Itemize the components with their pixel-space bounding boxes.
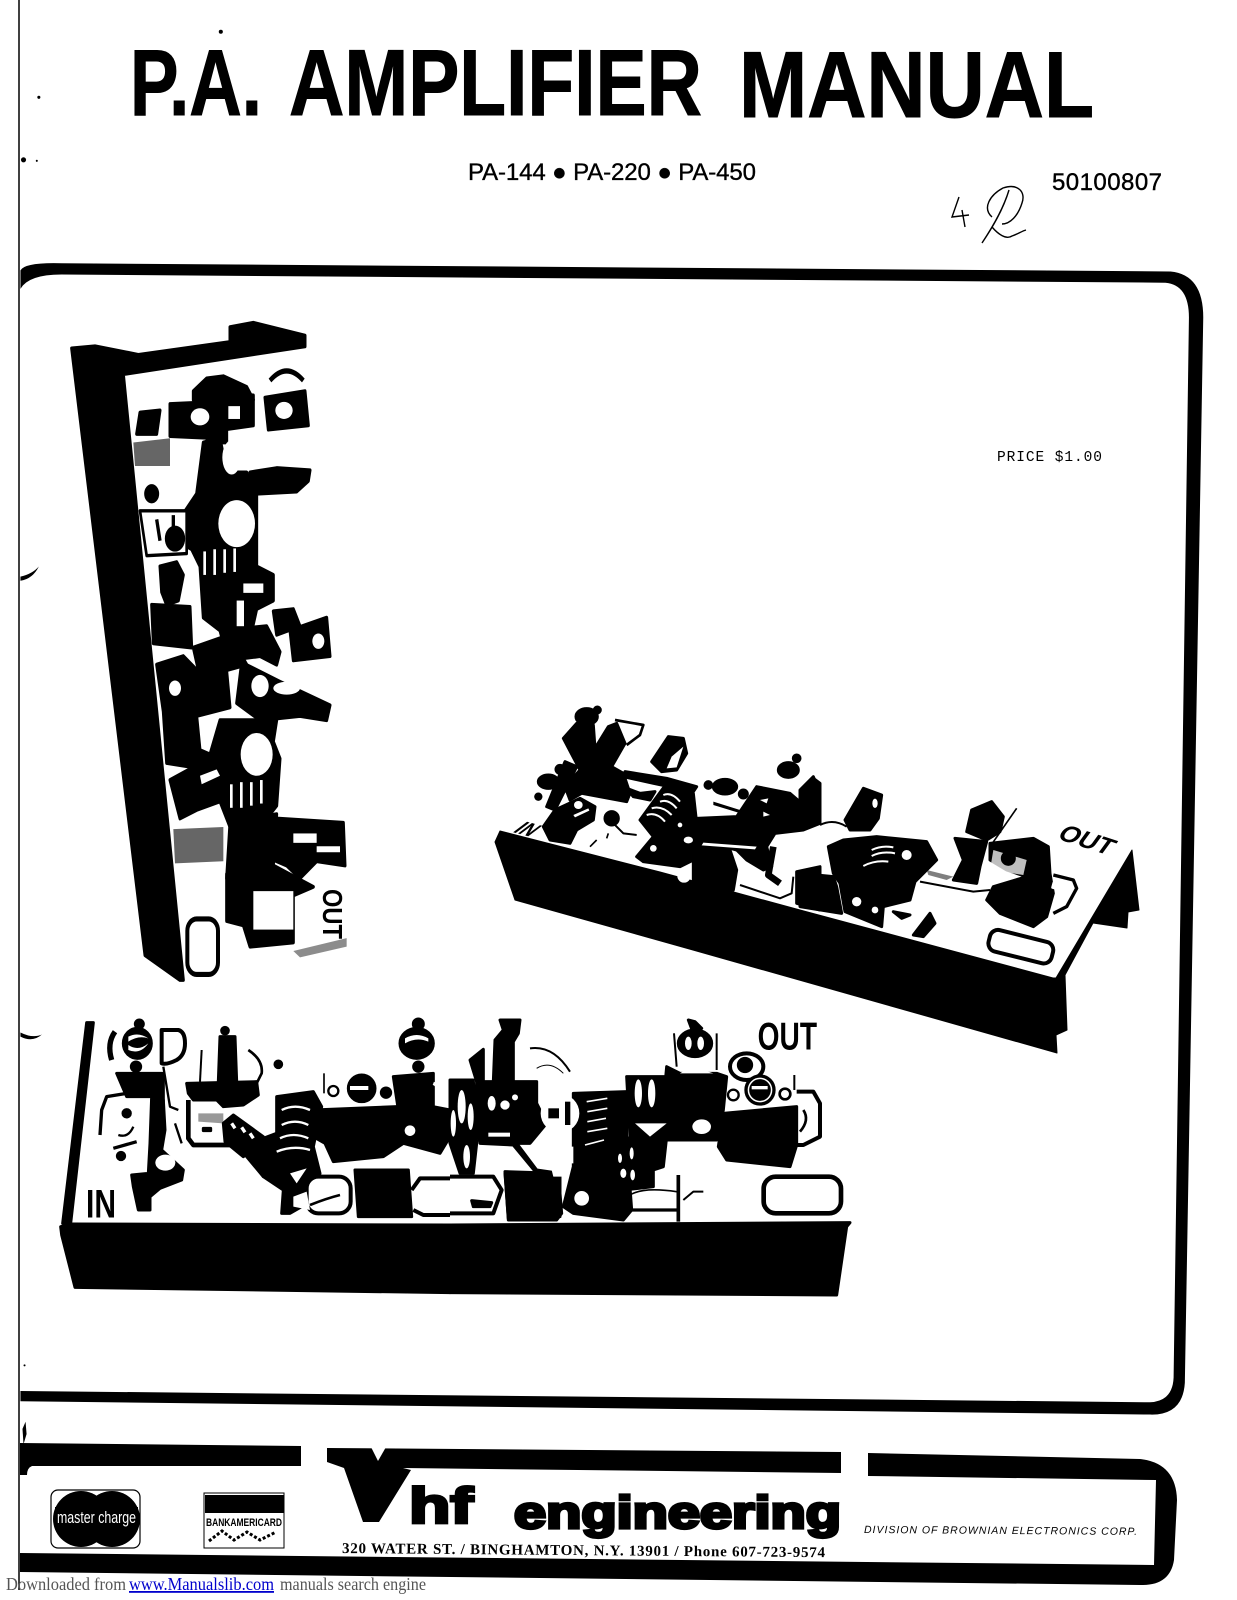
heat sink side (61, 1224, 450, 1293)
photo: vertical amplifier module (72, 323, 348, 980)
scan marks (20, 30, 223, 1444)
download footer: manuals search engine (280, 1574, 426, 1594)
heat sink side (450, 1223, 850, 1295)
title: P.A. (130, 30, 262, 135)
footer band (20, 1443, 1177, 1585)
download footer: Downloaded from (6, 1574, 126, 1594)
part number: 50100807 (1052, 169, 1162, 196)
heat sink side (72, 323, 305, 980)
title (130, 30, 1094, 137)
mounting slot (987, 928, 1055, 965)
photo: angled amplifier module (495, 707, 1139, 1053)
division line: DIVISION OF BROWNIAN ELECTRONICS CORP. (864, 1524, 1137, 1538)
handwritten mark (952, 187, 1026, 243)
logo: master charge (51, 1490, 140, 1548)
label: in: IN (86, 1183, 116, 1227)
download footer (6, 1574, 426, 1594)
photo: front amplifier module (61, 1014, 850, 1295)
circuit board components, right half (800, 777, 1121, 965)
logo: bankamericard: BANKAMERICARD (206, 1517, 282, 1529)
title: AMPLIFIER (289, 30, 702, 135)
mounting slot (764, 1177, 841, 1213)
title: MANUAL (739, 32, 1094, 137)
label: out: OUT (1052, 821, 1121, 860)
label: out: OUT (317, 889, 348, 939)
label: in: IN (508, 818, 548, 840)
heat sink side (495, 831, 1139, 1053)
brand: vhf engineering: hf (409, 1478, 473, 1534)
circuit board components (133, 371, 347, 957)
address line: 320 WATER ST. / BINGHAMTON, N.Y. 13901 / Phone 607-723-9574 (342, 1541, 826, 1561)
circuit board components, left half (536, 707, 820, 910)
mounting slot (187, 919, 218, 974)
model numbers: PA-144 ● PA-220 ● PA-450 (468, 159, 756, 186)
price: PRICE $1.00 (997, 450, 1102, 466)
label: out: OUT (758, 1014, 817, 1058)
brand: vhf engineering: engineering (514, 1487, 841, 1538)
brand: vhf engineering (327, 1447, 841, 1538)
light details (169, 402, 340, 930)
right half of module (450, 1014, 850, 1295)
logo: bankamericard (204, 1493, 284, 1548)
download footer: www.Manualslib.com (129, 1574, 274, 1594)
logo: master charge: master charge (57, 1508, 136, 1527)
left half of module (61, 1019, 450, 1293)
main rounded frame (20, 263, 1203, 1415)
